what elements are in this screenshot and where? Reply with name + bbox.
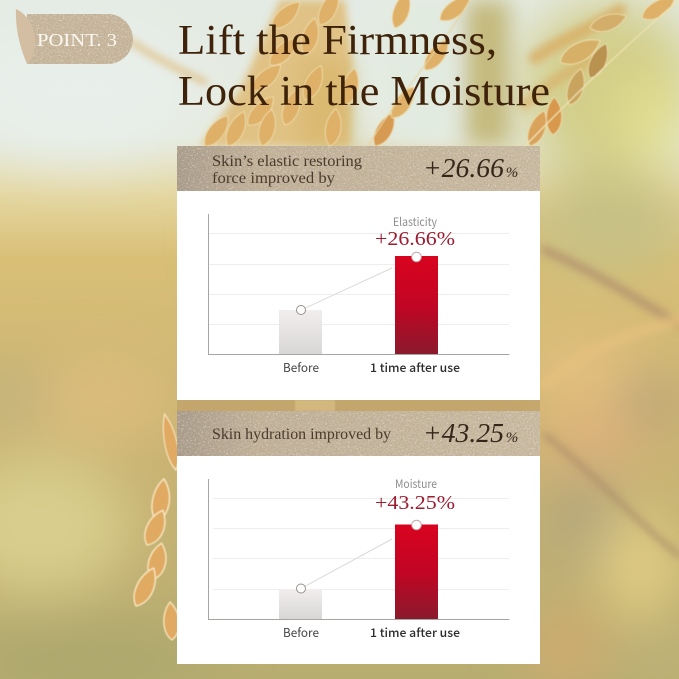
chart panel: elasticity bar chart bbox=[177, 191, 540, 400]
panel header: elasticity: force improved by bbox=[212, 170, 335, 187]
rice grains: top panicles bbox=[199, 0, 679, 151]
panel: elasticity bbox=[177, 146, 540, 400]
rice cluster haze bbox=[200, 0, 352, 146]
panel header: moisture: +43.25 bbox=[423, 418, 504, 448]
panel: moisture bbox=[177, 411, 540, 664]
chart panel: elasticity bar chart: Elasticity bbox=[393, 214, 437, 230]
tag: POINT. 3: POINT. 3 bbox=[37, 30, 117, 50]
bar: 1 time after use bbox=[395, 524, 438, 619]
panel header: moisture bbox=[177, 411, 540, 456]
chart panel: elasticity bar chart: Before bbox=[283, 359, 319, 376]
panel header: elasticity: Skin’s elastic restoring bbox=[212, 153, 362, 170]
tag: POINT. 3 bbox=[16, 9, 133, 64]
bar: 1 time after use bbox=[395, 256, 438, 354]
chart panel: moisture bar chart: Moisture bbox=[395, 476, 437, 492]
panel header: elasticity: % bbox=[506, 165, 518, 181]
chart panel: elasticity bar chart: +26.66% bbox=[375, 228, 455, 250]
chart panel: moisture bar chart bbox=[177, 456, 540, 664]
rice grains: lower left panicle bbox=[128, 413, 182, 640]
panel header: elasticity: +26.66 bbox=[423, 153, 504, 183]
bar: before bbox=[279, 310, 322, 354]
title: Lock in the Moisture bbox=[178, 69, 550, 115]
blurred top background columns bbox=[300, 0, 510, 146]
panel header: elasticity bbox=[177, 146, 540, 191]
glimpses of rice between panels bbox=[177, 400, 540, 411]
bar: before bbox=[279, 589, 322, 619]
panel header: moisture: % bbox=[506, 430, 518, 446]
chart panel: moisture bar chart: 1 time after use bbox=[370, 624, 460, 641]
title: Lift the Firmness, bbox=[178, 18, 497, 64]
chart panel: elasticity bar chart: 1 time after use bbox=[370, 359, 460, 376]
panel header: moisture: Skin hydration improved by bbox=[212, 426, 391, 443]
chart panel: moisture bar chart: +43.25% bbox=[375, 492, 455, 514]
chart panel: moisture bar chart: Before bbox=[283, 624, 319, 641]
title bbox=[178, 18, 550, 115]
